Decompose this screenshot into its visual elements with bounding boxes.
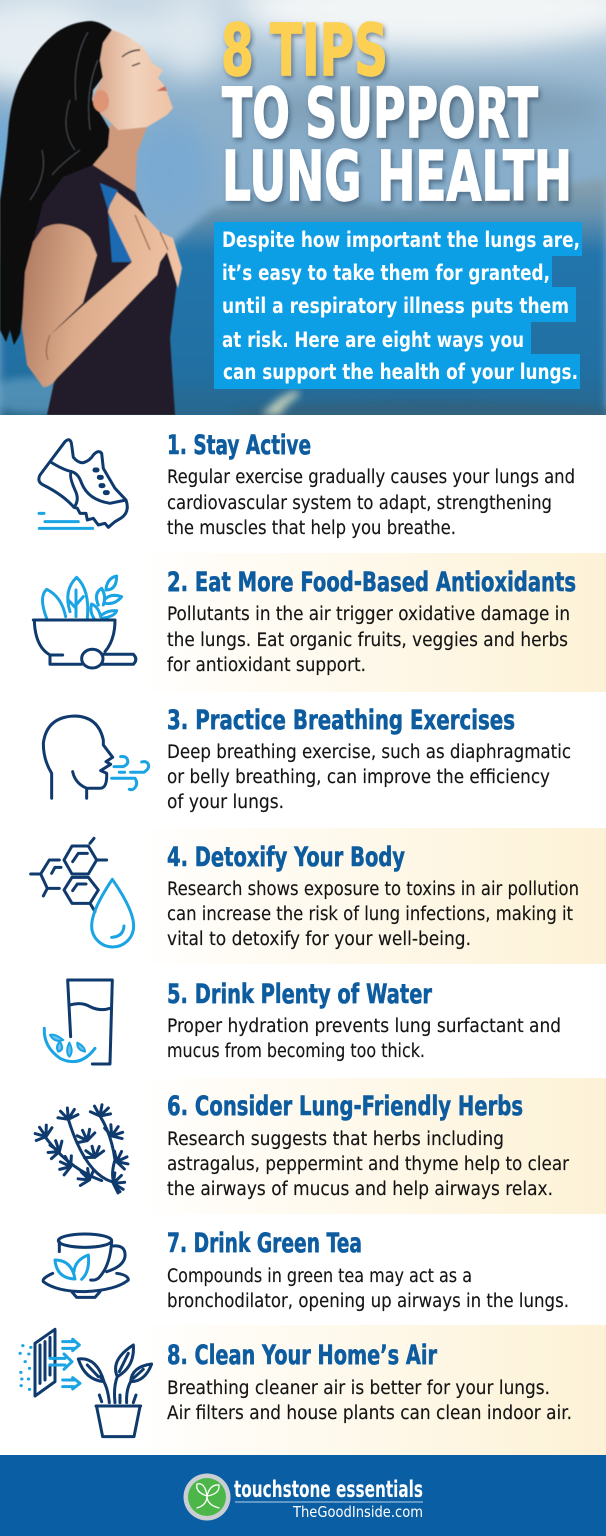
hair highlights <box>30 32 98 200</box>
lips <box>156 86 167 91</box>
face <box>95 30 173 130</box>
title line 1: 8 TIPS <box>221 9 388 92</box>
icon: air filter and plant <box>20 1329 152 1437</box>
neck <box>93 125 147 195</box>
body: bronchodilator, opening up airways in the lungs. <box>167 1291 569 1312</box>
tip 2: antioxidants <box>33 567 576 676</box>
arm and hand <box>22 192 182 387</box>
body: Research suggests that herbs including <box>167 1129 504 1150</box>
heading: 8. Clean Your Home’s Air <box>167 1340 437 1371</box>
callout text <box>222 228 580 385</box>
body <box>167 1266 569 1312</box>
heading: 5. Drink Plenty of Water <box>167 979 432 1010</box>
tip 4: detoxify <box>31 838 579 950</box>
body <box>167 1016 561 1062</box>
facial features <box>122 50 140 66</box>
body <box>167 1378 572 1424</box>
shirt print <box>100 183 133 262</box>
hero photo: woman breathing in mountain air <box>0 0 606 430</box>
body: the muscles that help you breathe. <box>167 518 456 539</box>
body: astragalus, peppermint and thyme help to clear <box>167 1154 569 1175</box>
ear <box>93 90 109 112</box>
title <box>221 9 572 217</box>
body: the airways of mucus and help airways relax. <box>167 1179 553 1200</box>
woman <box>0 21 182 415</box>
tip 5: water <box>44 979 561 1064</box>
body: Breathing cleaner air is better for your lungs. <box>167 1378 550 1399</box>
body: cardiovascular system to adapt, strengthening <box>167 493 552 514</box>
icon: thyme sprigs <box>31 1104 132 1193</box>
body: the lungs. Eat organic fruits, veggies and herbs <box>167 630 568 651</box>
icon: running shoe <box>39 440 127 528</box>
icon: molecule and drop <box>31 838 134 947</box>
hair <box>0 21 112 345</box>
sky and clouds <box>0 0 606 415</box>
body <box>167 879 579 950</box>
body <box>167 1129 569 1200</box>
body: Pollutants in the air trigger oxidative damage in <box>167 604 570 625</box>
cream background bands <box>140 553 606 1455</box>
body: vital to detoxify for your well-being. <box>167 929 471 950</box>
tip 8: clean air <box>20 1329 572 1437</box>
body: or belly breathing, can improve the efficiency <box>167 767 550 788</box>
intro callout <box>214 222 582 389</box>
body: Proper hydration prevents lung surfactant and <box>167 1016 561 1037</box>
icon: teacup <box>43 1234 128 1297</box>
tip 7: green tea <box>43 1228 569 1312</box>
mountains <box>0 178 606 430</box>
heading: 4. Detoxify Your Body <box>167 842 405 873</box>
brand name: touchstone essentials <box>234 1477 423 1503</box>
arm crease and finger lines <box>46 215 168 360</box>
body: for antioxidant support. <box>167 655 366 676</box>
callout highlight bars <box>214 222 582 389</box>
footer <box>0 1455 606 1536</box>
body <box>167 742 571 813</box>
tip 3: breathing exercises <box>43 705 571 813</box>
callout text: at risk. Here are eight ways you <box>222 328 524 353</box>
body <box>167 604 570 676</box>
body <box>167 467 575 539</box>
body: mucus from becoming too thick. <box>167 1041 425 1062</box>
body: Deep breathing exercise, such as diaphragmatic <box>167 742 571 763</box>
heading: 1. Stay Active <box>167 430 311 461</box>
icon: bowl with herbs and spoon <box>33 576 136 668</box>
footer band <box>0 1455 606 1536</box>
heading: 7. Drink Green Tea <box>167 1228 362 1259</box>
icon: glass and lemon <box>44 980 112 1064</box>
icon: head exhaling <box>43 716 149 798</box>
website: TheGoodInside.com <box>292 1503 423 1521</box>
body: of your lungs. <box>167 792 284 813</box>
tip 1: stay active <box>39 430 575 539</box>
shirt <box>33 165 177 415</box>
body: Compounds in green tea may act as a <box>167 1266 472 1287</box>
tip 6: herbs <box>31 1091 569 1200</box>
body: Air filters and house plants can clean indoor air. <box>167 1403 572 1424</box>
logo mark <box>184 1474 230 1520</box>
